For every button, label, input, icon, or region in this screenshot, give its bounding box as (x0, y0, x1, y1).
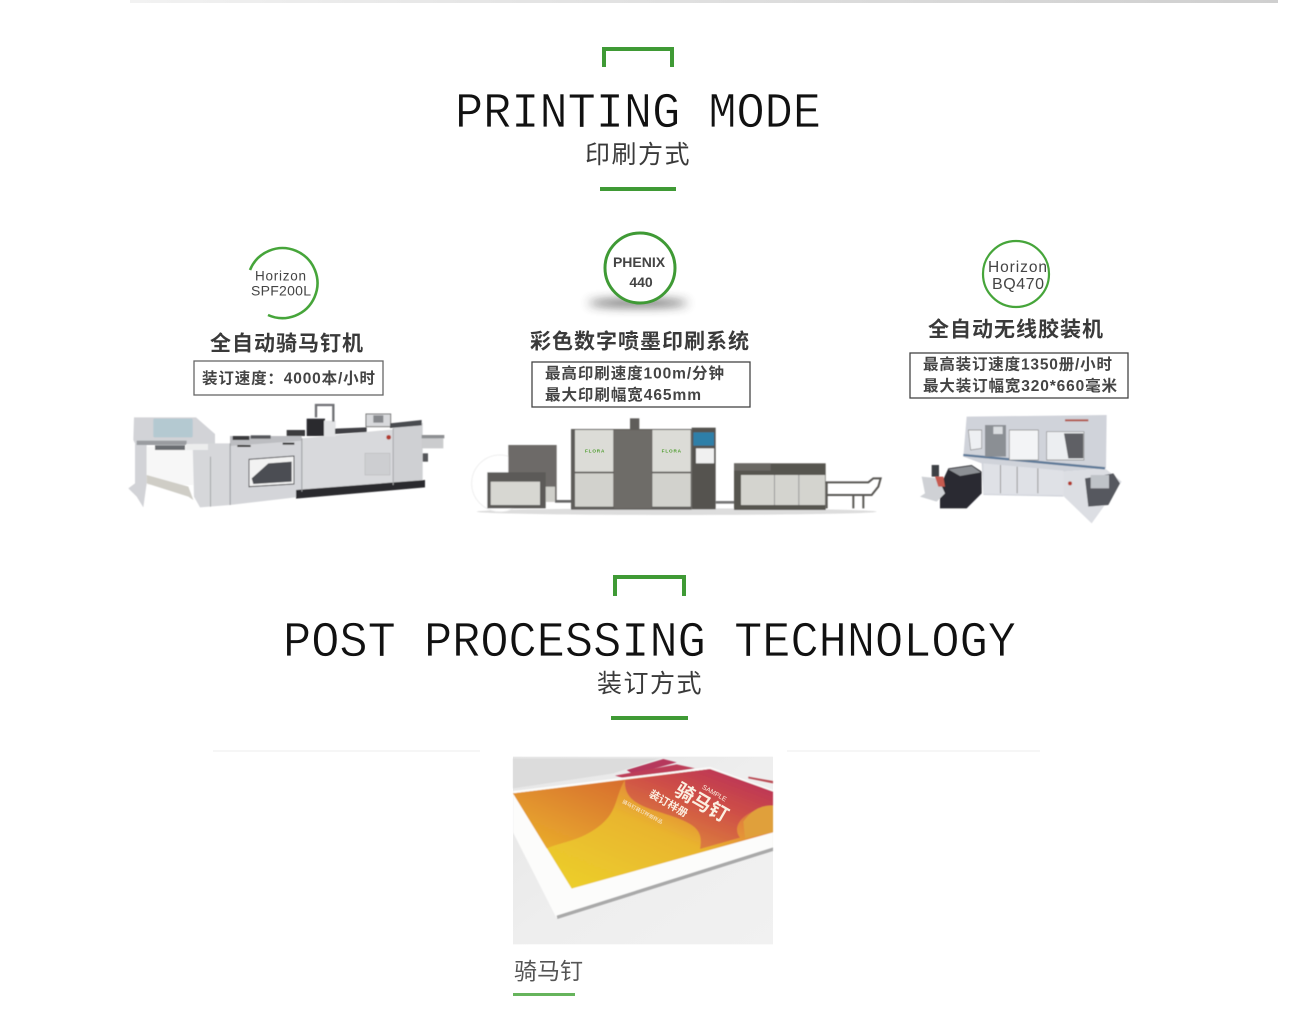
green bracket (604, 49, 672, 67)
photo: printed booklet: 骑马钉装订样册样品 (621, 798, 664, 826)
logo: PHENIX 440 (588, 233, 688, 307)
spec box: 最高印刷速度100m/分钟 (545, 364, 724, 382)
machine illustration: binder (920, 415, 1122, 523)
machine title: 全自动无线胶装机 (928, 318, 1103, 342)
spec box (194, 361, 383, 395)
machine title: 彩色数字喷墨印刷系统 (530, 330, 749, 354)
logo: Horizon BQ470: Horizon (988, 259, 1047, 276)
english title: PRINTING MODE (455, 86, 821, 143)
photo: printed booklet: SAMPLE (701, 784, 728, 804)
chinese subtitle: 装订方式 (597, 670, 703, 698)
top edge strip (130, 0, 1278, 3)
panel: perfect binder (910, 241, 1128, 523)
spec box: 最高装订速度1350册/小时 (923, 354, 1112, 374)
machine title: 全自动骑马钉机 (210, 332, 363, 356)
spec box: 最大装订幅宽320*660毫米 (923, 376, 1117, 395)
panel: digital inkjet press (472, 233, 881, 515)
photo caption: 骑马钉 (514, 958, 583, 984)
machine illustration: press: FLORA (662, 448, 682, 453)
panel: saddle stitcher (128, 248, 444, 507)
photo: printed booklet: 骑马钉 (671, 779, 732, 827)
logo: PHENIX 440: 440 (629, 274, 653, 290)
faint divider lines (213, 750, 1040, 752)
spec box: 最大印刷幅宽465mm (545, 385, 701, 404)
spec box (532, 362, 750, 407)
logo: PHENIX 440: PHENIX (613, 254, 666, 270)
spec box (910, 353, 1128, 398)
green caption underline (513, 993, 575, 996)
spec box: 装订速度：4000本/小时 (202, 368, 375, 388)
panel: saddle stitch sample (513, 757, 773, 996)
machine illustration: press: FLORA (585, 448, 605, 453)
logo: Horizon BQ470 (983, 241, 1049, 307)
logo: Horizon SPF200L: SPF200L (251, 282, 311, 298)
green underline (600, 187, 676, 191)
photo: printed booklet: 装订样册 (647, 787, 690, 820)
logo: Horizon SPF200L: Horizon (255, 268, 306, 284)
english title: POST PROCESSING TECHNOLOGY (283, 615, 1016, 672)
green underline (611, 716, 688, 720)
heading: printing mode (455, 49, 821, 191)
photo: printed booklet (513, 757, 773, 944)
logo: Horizon BQ470: BQ470 (992, 276, 1044, 293)
logo: Horizon SPF200L (250, 248, 317, 318)
machine illustration: press (472, 418, 881, 515)
chinese subtitle: 印刷方式 (585, 141, 691, 169)
machine illustration: stitcher (128, 405, 444, 507)
green bracket (615, 577, 684, 596)
heading: post processing technology (283, 577, 1016, 720)
